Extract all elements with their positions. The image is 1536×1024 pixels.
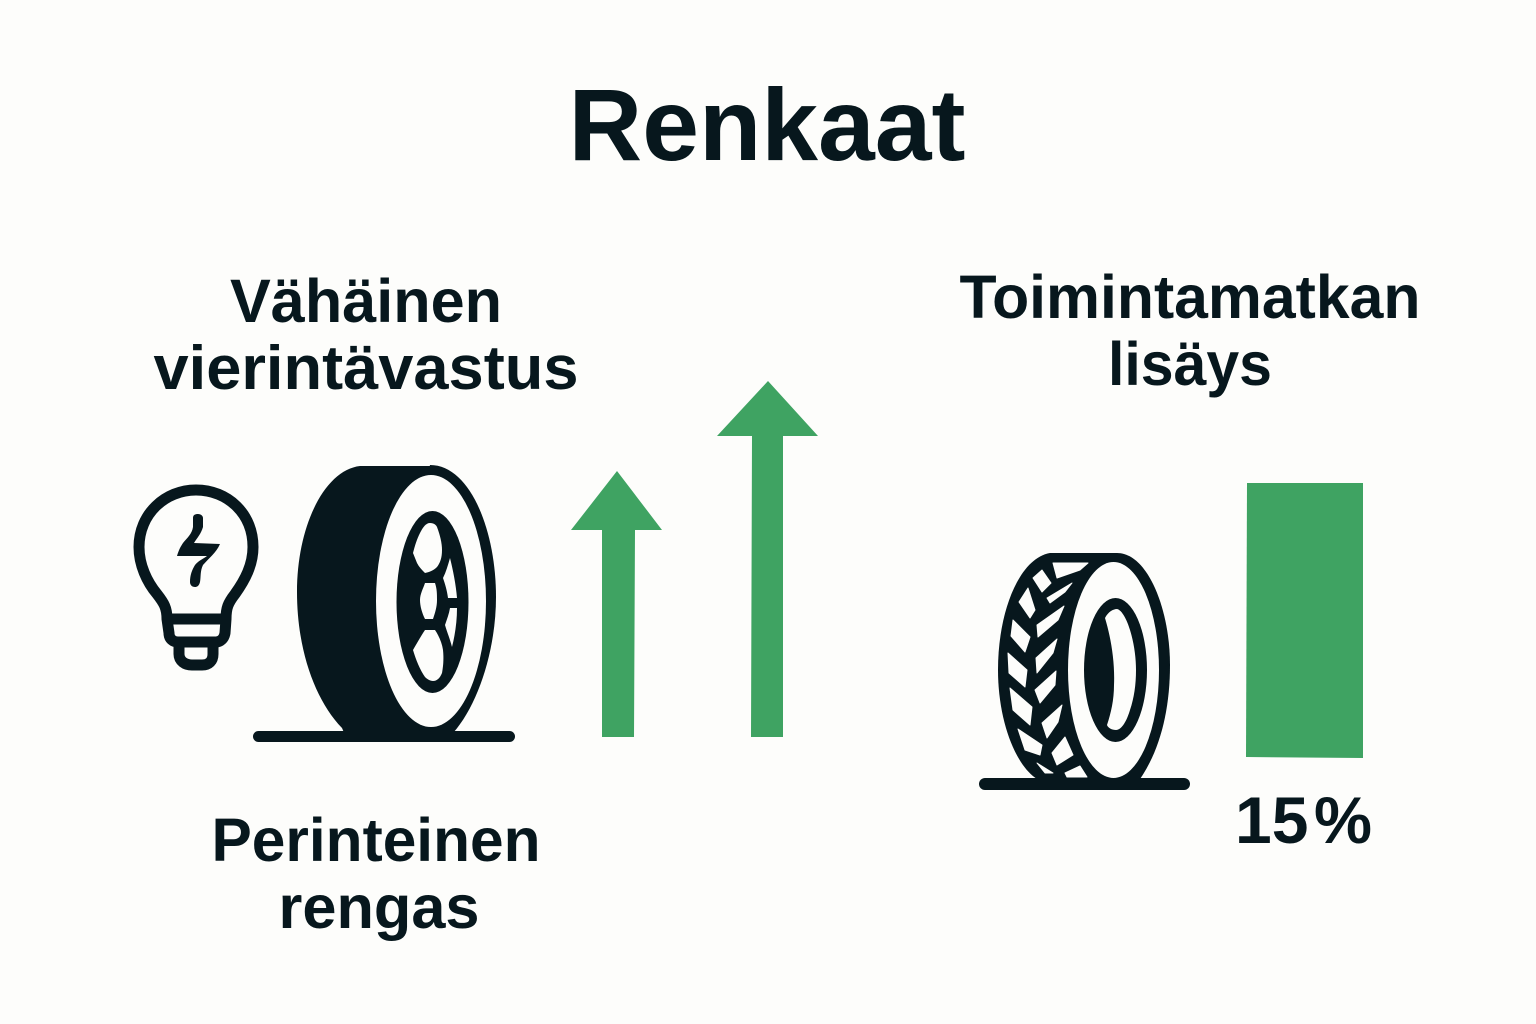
label: conventional tyre: Perinteinen: [212, 806, 540, 874]
heading: low rolling resistance: [154, 267, 578, 403]
heading: range increase: Toimintamatkan: [960, 263, 1420, 331]
bulb base: [179, 645, 213, 665]
tyre sidewall: [1068, 562, 1159, 778]
heading: low rolling resistance: Vähäinen: [230, 267, 502, 335]
icon: low-resistance tyre with tread: [998, 553, 1170, 779]
value: 15 percent: [1235, 783, 1372, 857]
tread blocks: [1008, 563, 1088, 777]
wheel rim: [396, 511, 468, 693]
hub opening: [1105, 609, 1136, 730]
label: conventional tyre: rengas: [278, 873, 480, 941]
heading: range increase: lisäys: [1108, 330, 1272, 398]
tyre outer shape: [998, 553, 1170, 779]
collar band: [167, 614, 226, 624]
arrow: tall green up arrow: [717, 381, 818, 737]
tyre body: [297, 466, 430, 735]
arrow: short green up arrow: [571, 471, 662, 737]
value: 15 percent: %: [1314, 783, 1372, 857]
bulb glass and collar: [139, 490, 253, 642]
bar: 15 percent range increase: [1246, 483, 1363, 758]
ground line: tread tyre: [979, 778, 1190, 790]
title: Renkaat: [568, 68, 966, 182]
tyre hub: [1084, 598, 1147, 742]
ground line: conventional tyre: [253, 731, 515, 742]
icon: conventional tyre: [297, 465, 496, 735]
tyre face: [400, 465, 496, 735]
label: conventional tyre: [212, 806, 540, 941]
rim openings: [413, 523, 457, 681]
icon: light bulb with lightning bolt: [139, 490, 253, 665]
value: 15 percent: 15: [1235, 783, 1308, 857]
heading: low rolling resistance: vierintävastus: [154, 334, 578, 403]
heading: range increase: [960, 263, 1420, 398]
lightning bolt: [177, 514, 220, 587]
